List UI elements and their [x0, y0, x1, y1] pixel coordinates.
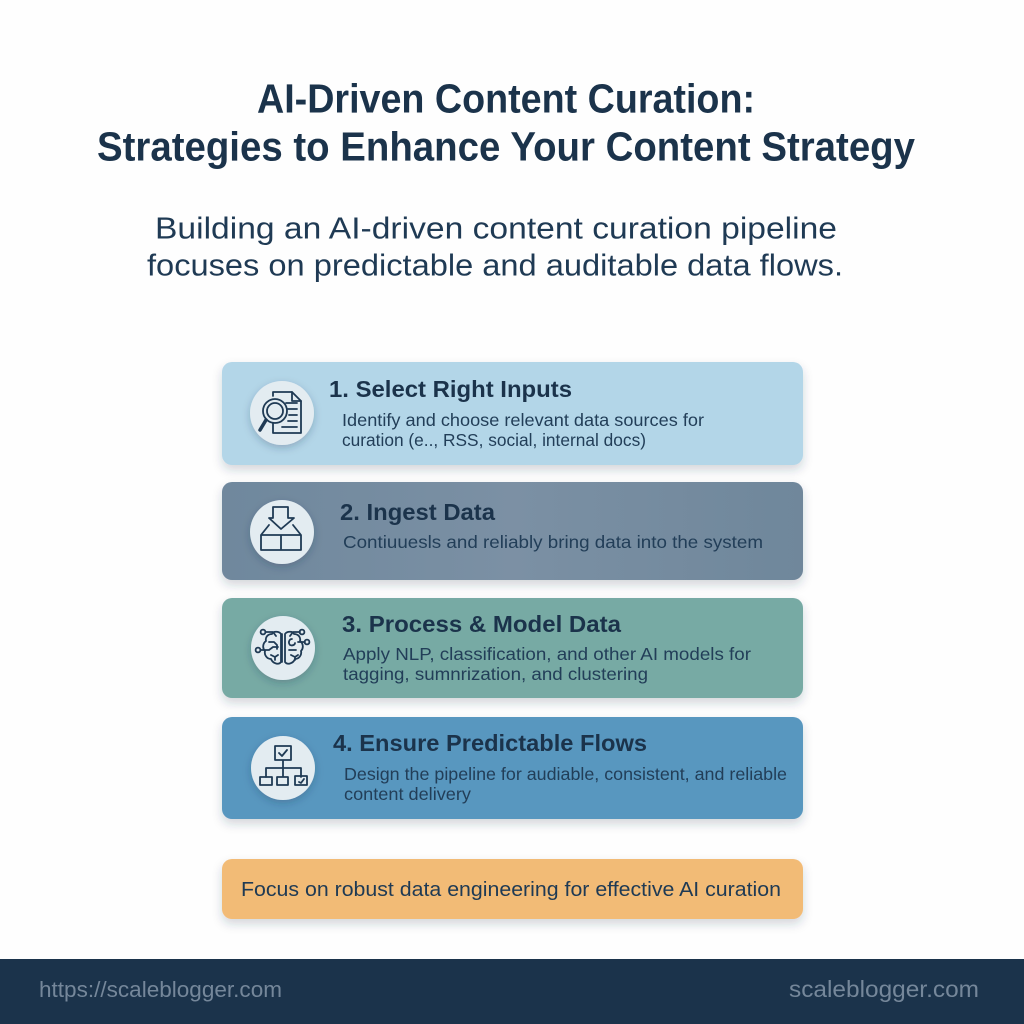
description: step 3: Apply NLP, classification, and other AI models for: [343, 644, 751, 664]
description: step 1: [342, 410, 704, 450]
callout: Focus on robust data engineering for effective AI curation: [241, 879, 781, 901]
panel: step 3 process and model data: [222, 598, 803, 698]
description: step 3: tagging, sumnrization, and clustering: [343, 664, 648, 684]
icon: document with magnifying glass: [250, 381, 314, 445]
description: step 1: Identify and choose relevant data sources for: [342, 410, 704, 430]
icon: brain network: [251, 616, 315, 680]
panel: step 4 ensure predictable flows: [222, 717, 803, 819]
icon: inbox box with arrow: [250, 500, 314, 564]
subtitle: Building an AI-driven content curation pipeline: [155, 210, 837, 246]
icon: flow hierarchy with checks: [251, 736, 315, 800]
description: step 2: Contiuuesls and reliably bring data into the system: [343, 532, 763, 552]
heading: step 3: 3. Process & Model Data: [342, 611, 622, 637]
title: AI-Driven Content Curation:: [257, 76, 755, 122]
description: step 4: content delivery: [344, 784, 471, 804]
description: step 1: curation (e.., RSS, social, internal docs): [342, 430, 646, 450]
panel: step 1 select right inputs: [222, 362, 803, 465]
title: Strategies to Enhance Your Content Strategy: [97, 124, 915, 170]
panel: step 2 ingest data: [222, 482, 803, 580]
subtitle: [147, 210, 843, 282]
subtitle: focuses on predictable and auditable data flows.: [147, 248, 843, 282]
callout: [222, 859, 803, 919]
footer: [0, 959, 1024, 1024]
footer url: https://scaleblogger.com: [39, 977, 282, 1002]
heading: step 4: 4. Ensure Predictable Flows: [333, 730, 647, 756]
heading: step 1: 1. Select Right Inputs: [329, 376, 572, 402]
title: [97, 76, 915, 170]
footer brand: scaleblogger.com: [789, 976, 979, 1002]
description: step 4: [344, 764, 787, 804]
heading: step 2: 2. Ingest Data: [340, 499, 496, 525]
description: step 3: [343, 644, 751, 684]
description: step 4: Design the pipeline for audiable, consistent, and reliable: [344, 764, 787, 784]
